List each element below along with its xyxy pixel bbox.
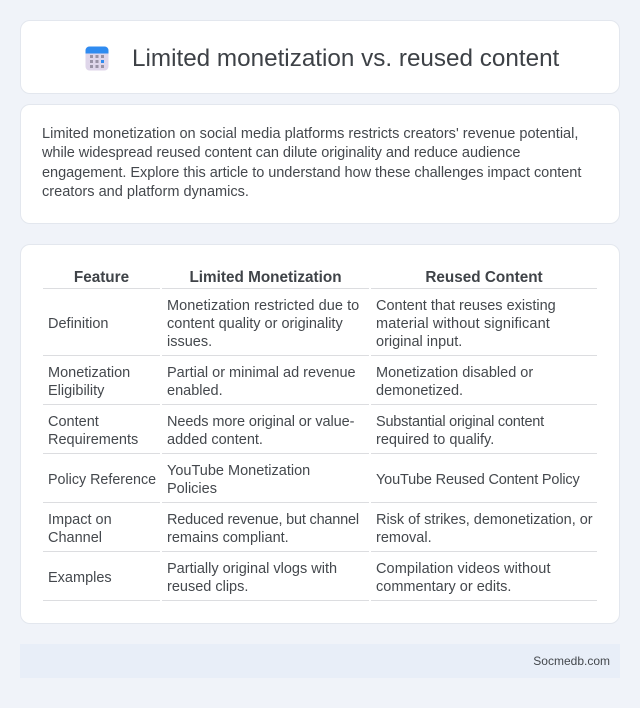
row: content requirements: required to qualify. — [376, 432, 494, 448]
row: monetization eligibility: Eligibility — [48, 383, 104, 399]
icon: calendar — [86, 46, 108, 70]
panel: title card — [20, 20, 620, 94]
row: content requirements: Requirements — [48, 432, 138, 448]
panel: comparison table — [20, 244, 620, 624]
table header: Limited Monetization — [189, 269, 342, 286]
row: impact on channel: removal. — [376, 530, 432, 546]
row: policy reference — [48, 463, 580, 497]
row: impact on channel: Impact on — [48, 512, 112, 528]
row: policy reference: YouTube Reused Content Policy — [376, 472, 580, 488]
row: impact on channel: Risk of strikes, demonetization, or — [376, 512, 593, 528]
row: examples: Partially original vlogs with — [167, 561, 337, 577]
row: definition: content quality or originality — [167, 316, 343, 332]
row: definition: Definition — [48, 316, 108, 332]
row: policy reference: Policies — [167, 481, 217, 497]
row: definition: material without significant — [376, 316, 550, 332]
row: monetization eligibility: Partial or minimal ad revenue — [167, 365, 356, 381]
row: monetization eligibility: demonetized. — [376, 383, 463, 399]
intro text — [42, 126, 582, 200]
row: policy reference: Policy Reference — [48, 472, 156, 488]
footer bar — [20, 644, 620, 678]
row: examples: Compilation videos without — [376, 561, 551, 577]
intro text: while widespread reused content can dilute originality and reduce audience — [42, 145, 520, 161]
title: Limited monetization vs. reused content — [132, 45, 559, 72]
row: monetization eligibility: enabled. — [167, 383, 223, 399]
table header — [74, 269, 543, 286]
panel: introduction — [20, 104, 620, 224]
row: examples: commentary or edits. — [376, 579, 511, 595]
row: definition: issues. — [167, 334, 212, 350]
row: monetization eligibility: Monetization — [48, 365, 130, 381]
row: content requirements: Content — [48, 414, 99, 430]
row: monetization eligibility: Monetization disabled or — [376, 365, 533, 381]
row: impact on channel: Channel — [48, 530, 102, 546]
row: definition: Monetization restricted due to — [167, 298, 359, 314]
row: policy reference: YouTube Monetization — [167, 463, 310, 479]
row: impact on channel: Reduced revenue, but channel — [167, 512, 359, 528]
row: content requirements: Needs more original or value- — [167, 414, 354, 430]
table header: Feature — [74, 269, 129, 286]
row: definition — [48, 298, 556, 350]
intro text: creators and platform dynamics. — [42, 184, 249, 200]
row: content requirements: added content. — [167, 432, 263, 448]
row: definition: Content that reuses existing — [376, 298, 556, 314]
divider lines — [43, 288, 597, 601]
row: definition: original input. — [376, 334, 462, 350]
footer text: Socmedb.com — [533, 654, 610, 668]
intro text: engagement. Explore this article to understand how these challenges impact content — [42, 165, 581, 181]
row: examples: Examples — [48, 570, 112, 586]
table header: Reused Content — [425, 269, 543, 286]
row: content requirements — [48, 414, 544, 448]
row: impact on channel — [48, 512, 593, 546]
comparison table — [43, 269, 597, 601]
intro text: Limited monetization on social media platforms restricts creators' revenue potential, — [42, 126, 578, 142]
row: impact on channel: remains compliant. — [167, 530, 289, 546]
row: examples — [48, 561, 551, 595]
row: monetization eligibility — [48, 365, 533, 399]
row: examples: reused clips. — [167, 579, 248, 595]
row: content requirements: Substantial original content — [376, 414, 544, 430]
